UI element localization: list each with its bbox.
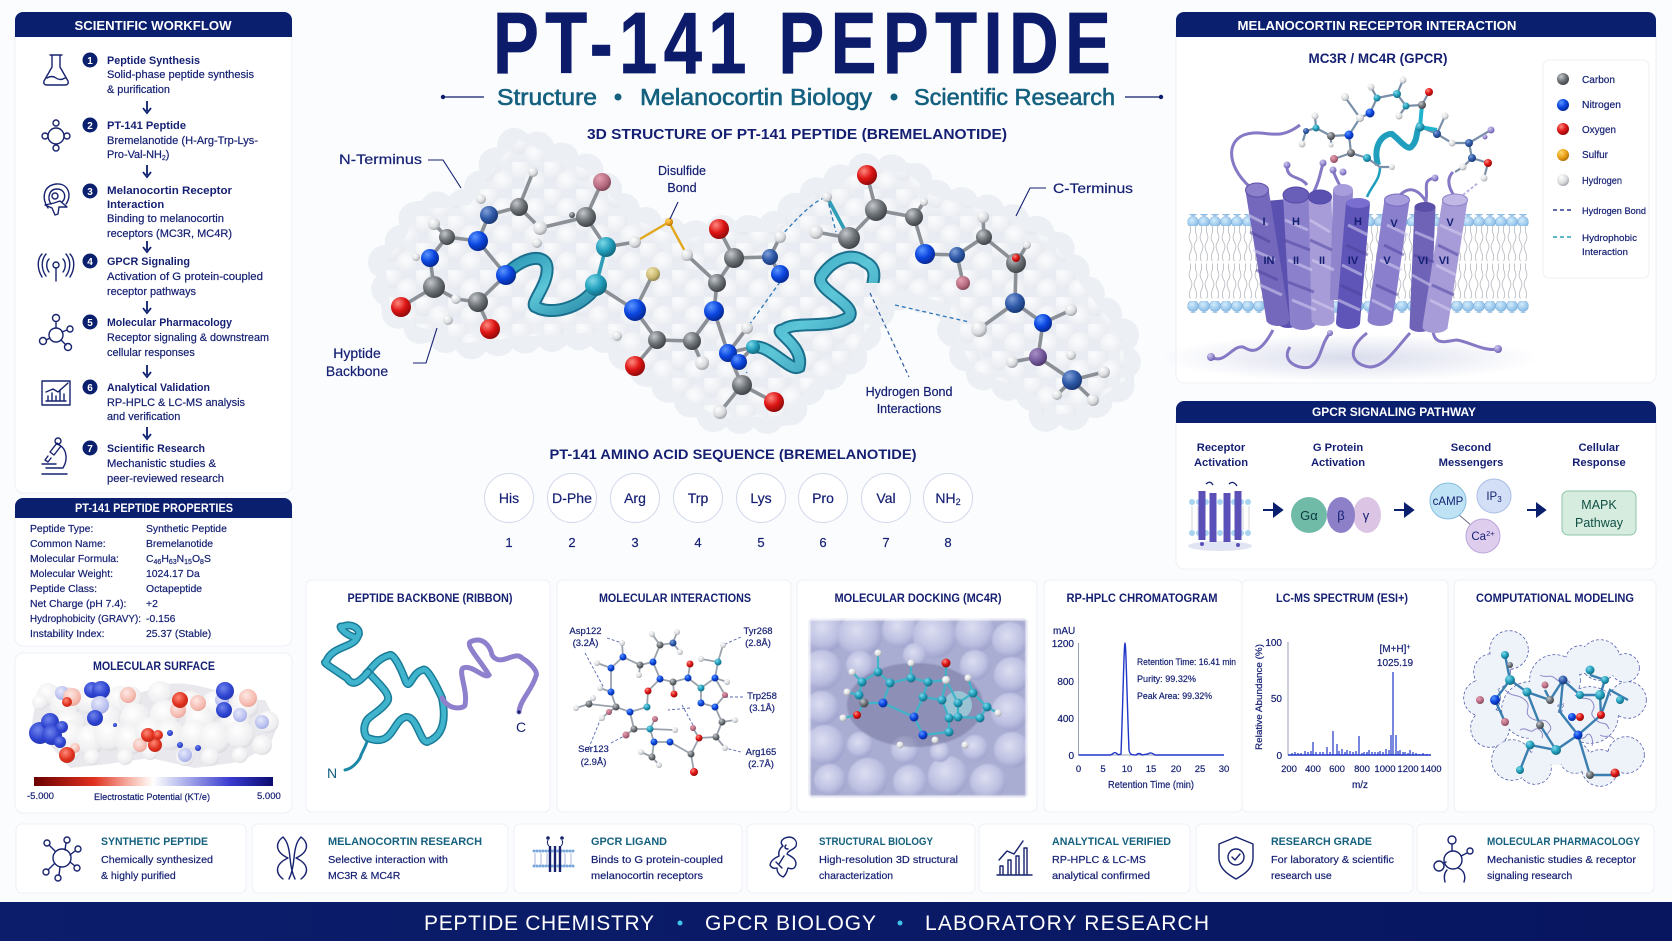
chromatogram chart: 5: [1100, 764, 1106, 775]
subtitle: Structure: [497, 84, 597, 110]
icon: protein: [770, 837, 796, 877]
amino acid sequence: 2: [568, 535, 576, 550]
card: synthetic peptide: [16, 824, 246, 893]
chromatogram chart: 10: [1122, 764, 1132, 775]
dashed hydrogen bonds: [739, 197, 969, 385]
second messengers: [1430, 479, 1511, 553]
heading: properties: PT-141 PEPTIDE PROPERTIES: [75, 503, 233, 515]
step labels: Response: [1572, 457, 1626, 469]
property rows: 15: [184, 559, 192, 566]
step labels: Messengers: [1439, 457, 1503, 469]
chart: electrostatic surface: [29, 681, 279, 768]
workflow step 5: [40, 314, 269, 359]
colour bar legend: Electrostatic Potential (KT/e): [94, 792, 210, 803]
second messengers: 3: [1497, 495, 1502, 504]
label: C-Terminus: [1016, 180, 1133, 216]
G protein: β: [1337, 508, 1345, 523]
card text: MELANOCORTIN RESEARCH: [328, 836, 482, 848]
card text: RESEARCH GRADE: [1271, 836, 1372, 848]
panel: molecular surface: [15, 653, 292, 813]
chromatogram chart: [1052, 626, 1236, 791]
amino acid sequence: His: [499, 490, 519, 506]
property rows: Peptide Class:: [30, 584, 97, 595]
arrow: [143, 101, 151, 113]
helix labels: [1262, 216, 1454, 267]
arrow: [1263, 504, 1282, 516]
subtitle: Melanocortin Biology: [640, 84, 873, 110]
workflow step 2: [42, 118, 258, 162]
panel: computational modeling: [1454, 580, 1656, 812]
footer banner: LABORATORY RESEARCH: [925, 912, 1209, 935]
property rows: Bremelanotide: [146, 539, 213, 550]
amino acid sequence: NH: [935, 490, 956, 506]
label: Disulfide Bond: Bond: [667, 181, 697, 195]
card text: characterization: [819, 870, 893, 882]
spectrum chart: m/z: [1352, 780, 1368, 791]
workflow step 6: [42, 380, 246, 423]
card text: [591, 836, 723, 882]
second messengers: IP: [1486, 491, 1497, 503]
amino acid sequence: [484, 474, 972, 550]
heading: amino acid sequence: PT-141 AMINO ACID SEQUENCE (BREMELANOTIDE): [550, 446, 916, 462]
residue labels: Tyr268: [743, 626, 773, 637]
card text: analytical confirmed: [1052, 870, 1150, 882]
computational model: [1464, 631, 1646, 786]
icon: molecule: [43, 837, 81, 881]
molecular surface cloud: [385, 140, 1125, 417]
icon: shield: [1219, 837, 1253, 879]
residue labels: (3.2Å): [573, 638, 598, 649]
card text: MC3R & MC4R: [328, 870, 401, 882]
workflow step 3: Melanocortin Receptor: [107, 185, 233, 197]
footer banner: [0, 902, 1672, 941]
property rows: S: [204, 554, 211, 565]
legend: Carbon: [1582, 75, 1615, 86]
heading: MOLECULAR SURFACE: [93, 659, 215, 673]
arrow: [143, 301, 151, 313]
property rows: O: [192, 554, 200, 565]
residue labels: [569, 626, 777, 770]
step labels: Receptor: [1197, 442, 1246, 454]
chromatogram chart: 15: [1146, 764, 1156, 775]
panel: scientific workflow: [15, 12, 292, 493]
workflow step 5: Molecular Pharmacology: [107, 317, 233, 329]
property rows: -0.156: [146, 614, 176, 625]
workflow step 5: Receptor signaling & downstream: [107, 332, 269, 344]
mini receptor icon: [1188, 482, 1252, 551]
property rows: H: [161, 554, 169, 565]
card text: [1487, 836, 1640, 882]
3D molecule: [326, 140, 1133, 419]
label: Hyptide Backbone: Backbone: [326, 363, 388, 379]
amino acid sequence: 8: [944, 535, 952, 550]
chromatogram chart: 400: [1057, 714, 1074, 725]
second messengers: cAMP: [1433, 496, 1464, 508]
MAPK pathway box: Pathway: [1575, 516, 1624, 530]
arrow: [143, 241, 151, 252]
residue labels: Ser123: [578, 744, 609, 755]
chromatogram chart: Purity: 99.32%: [1137, 674, 1196, 684]
spectrum chart: 0: [1276, 751, 1282, 762]
ribbon drawing: [325, 625, 536, 770]
heading: PEPTIDE BACKBONE (RIBBON): [348, 593, 513, 605]
step labels: Activation: [1311, 457, 1365, 469]
colour bar legend: -5.000: [27, 791, 54, 802]
workflow step 4: Activation of G protein-coupled: [107, 271, 263, 283]
property rows: N: [177, 554, 184, 565]
chromatogram chart: Retention Time: 16.41 min: [1137, 657, 1236, 667]
heading: LC-MS SPECTRUM (ESI+): [1276, 593, 1408, 605]
amino acid sequence: 5: [757, 535, 765, 550]
workflow step 1: Solid-phase peptide synthesis: [107, 69, 255, 81]
amino acid sequence: 7: [882, 535, 890, 550]
heading: MOLECULAR INTERACTIONS: [599, 593, 751, 605]
chromatogram chart: Retention Time (min): [1108, 780, 1194, 791]
panel: molecular interactions: [557, 580, 791, 812]
footer banner: GPCR BIOLOGY: [705, 912, 876, 935]
arrow: [1527, 504, 1545, 516]
workflow step 5: cellular responses: [107, 347, 195, 359]
panel: RP-HPLC chromatogram: [1044, 580, 1242, 812]
workflow step 6: 6: [87, 383, 93, 394]
bonds: [401, 172, 1104, 412]
workflow step 7: peer-reviewed research: [107, 473, 224, 485]
property rows: 46: [154, 559, 161, 566]
property rows: +2: [146, 599, 158, 610]
card text: SYNTHETIC PEPTIDE: [101, 836, 208, 848]
helix labels: I: [1262, 216, 1266, 228]
icon: molecule network: [1434, 836, 1473, 882]
interaction diagram: [573, 629, 743, 776]
workflow step 4: [38, 254, 263, 298]
workflow step 6: and verification: [107, 411, 180, 423]
label: N-Terminus: N-Terminus: [339, 151, 422, 167]
spectrum chart: 50: [1271, 694, 1282, 705]
subtitle: Scientific Research: [914, 84, 1115, 110]
card: GPCR ligand: [514, 824, 742, 893]
helix labels: V: [1446, 217, 1454, 229]
property rows: Instability Index:: [30, 629, 105, 640]
G protein: γ: [1363, 508, 1370, 523]
card text: [1271, 836, 1394, 882]
transmembrane helices: [1246, 183, 1468, 333]
heading: MOLECULAR DOCKING (MC4R): [834, 593, 1002, 605]
MAPK pathway box: MAPK: [1581, 498, 1617, 512]
arrow: [1394, 504, 1413, 516]
workflow step 3: receptors (MC3R, MC4R): [107, 228, 232, 240]
card text: Chemically synthesized: [101, 854, 213, 866]
ribbon end labels: N: [327, 765, 337, 781]
spectrum chart: 800: [1354, 764, 1370, 775]
G protein: Gα: [1300, 508, 1318, 523]
arrow: [143, 165, 151, 177]
workflow step 3: Interaction: [107, 199, 164, 211]
chromatogram chart: Peak Area: 99.32%: [1137, 691, 1212, 701]
property rows: Synthetic Peptide: [146, 524, 227, 535]
card text: ANALYTICAL VERIFIED: [1052, 836, 1171, 848]
workflow step 4: 4: [87, 257, 93, 268]
workflow step 2: 2: [87, 121, 93, 132]
workflow step 3: [44, 184, 233, 240]
workflow step 7: Scientific Research: [107, 443, 205, 455]
property rows: C: [146, 554, 154, 565]
workflow step 2: 2: [162, 155, 166, 162]
residue labels: Trp258: [747, 691, 777, 702]
icon: bar chart: [997, 841, 1032, 875]
spectrum chart: [1254, 638, 1442, 791]
card text: RP-HPLC & LC-MS: [1052, 854, 1146, 866]
amino acid sequence: Trp: [688, 490, 708, 506]
property rows: [30, 524, 227, 640]
property rows: Peptide Type:: [30, 524, 93, 535]
panel: LC-MS spectrum: [1242, 580, 1448, 812]
card text: [101, 836, 213, 882]
card text: Selective interaction with: [328, 854, 448, 866]
helix labels: II: [1319, 255, 1325, 267]
spectrum chart: 100: [1265, 638, 1282, 649]
amino acid sequence: Val: [876, 490, 896, 506]
property rows: Octapeptide: [146, 584, 202, 595]
residue labels: (3.1Å): [749, 703, 775, 714]
card text: For laboratory & scientific: [1271, 854, 1394, 866]
step labels: G Protein: [1313, 442, 1363, 454]
workflow step 2: Pro-Val-NH: [107, 149, 162, 161]
workflow step 1: & purification: [107, 84, 170, 96]
helix labels: VI: [1439, 255, 1449, 267]
spectrum chart: Relative Abundance (%): [1254, 644, 1265, 750]
helix labels: H: [1354, 216, 1362, 228]
legend: Nitrogen: [1582, 100, 1621, 111]
arrow: [143, 365, 151, 377]
card text: GPCR LIGAND: [591, 836, 667, 848]
card text: melanocortin receptors: [591, 870, 703, 882]
colour bar legend: 5.000: [257, 791, 281, 802]
helix labels: H: [1292, 216, 1300, 228]
loops: [1211, 125, 1498, 368]
second messengers: 2+: [1486, 529, 1495, 538]
card text: signaling research: [1487, 870, 1572, 882]
chromatogram chart: 30: [1219, 764, 1229, 775]
heading: GPCR SIGNALING PATHWAY: [1312, 405, 1476, 419]
property rows: Net Charge (pH 7.4):: [30, 599, 126, 610]
panel: GPCR signaling pathway: [1176, 401, 1656, 569]
card: research grade: [1196, 824, 1413, 893]
workflow step 2: ): [166, 149, 169, 161]
property rows: 1024.17 Da: [146, 569, 200, 580]
card: structural biology: [747, 824, 975, 893]
card: analytical verified: [979, 824, 1190, 893]
spectrum chart: 1025.19: [1377, 658, 1414, 669]
card text: High-resolution 3D structural: [819, 854, 958, 866]
workflow step 2: PT-141 Peptide: [107, 120, 186, 132]
amino acid sequence: Lys: [750, 490, 772, 506]
helix labels: VI: [1418, 255, 1428, 267]
label: Disulfide Bond: Disulfide: [658, 164, 706, 178]
helix labels: V: [1383, 255, 1391, 267]
step labels: Cellular: [1578, 442, 1620, 454]
chromatogram chart: 20: [1171, 764, 1181, 775]
helix labels: IN: [1264, 255, 1275, 267]
label: Disulfide Bond: [658, 164, 706, 219]
amino acid sequence: 3: [631, 535, 639, 550]
panel: peptide backbone ribbon: [306, 580, 550, 812]
property rows: Molecular Weight:: [30, 569, 113, 580]
legend: Oxygen: [1582, 125, 1616, 136]
workflow step 4: GPCR Signaling: [107, 256, 190, 268]
amino acid sequence: 2: [956, 497, 961, 507]
property rows: Common Name:: [30, 539, 106, 550]
label: Hydrogen Bond Interactions: [866, 293, 952, 416]
workflow step 1: Peptide Synthesis: [107, 55, 200, 67]
panel: peptide properties: [15, 498, 292, 646]
step labels: Activation: [1194, 457, 1248, 469]
chromatogram chart: mAU: [1053, 626, 1075, 637]
amino acid sequence: 1: [505, 535, 513, 550]
legend: Interaction: [1582, 247, 1628, 258]
legend: Hydrophobic: [1582, 233, 1637, 244]
spectrum chart: 1400: [1420, 764, 1442, 775]
card text: [819, 836, 958, 882]
chromatogram chart: 25: [1195, 764, 1205, 775]
card text: MOLECULAR PHARMACOLOGY: [1487, 836, 1640, 848]
panel: peptide backbone ribbon: C: [516, 719, 526, 735]
G protein: [1291, 497, 1381, 533]
label: C-Terminus: C-Terminus: [1053, 180, 1133, 196]
workflow step 3: 3: [87, 187, 93, 198]
workflow step 1: 1: [87, 56, 93, 67]
spectrum chart: +: [1406, 644, 1411, 651]
helix labels: V: [1390, 218, 1398, 230]
property rows: 63: [169, 559, 177, 566]
card text: [1052, 836, 1171, 882]
workflow step 7: Mechanistic studies &: [107, 458, 217, 470]
colour bar legend: [27, 777, 281, 803]
amino acid sequence: D-Phe: [552, 490, 592, 506]
chromatogram chart: 0: [1076, 764, 1081, 775]
heading: RP-HPLC CHROMATOGRAM: [1066, 593, 1218, 605]
MAPK pathway box: [1562, 491, 1636, 535]
property rows: 25.37 (Stable): [146, 629, 211, 640]
label: Hydrogen Bond Interactions: Interactions: [877, 402, 941, 416]
card text: & highly purified: [101, 870, 176, 882]
spectrum chart: 600: [1329, 764, 1345, 775]
helix labels: II: [1293, 255, 1299, 267]
workflow step 2: Bremelanotide (H-Arg-Trp-Lys-: [107, 135, 258, 147]
step labels: Second: [1451, 442, 1491, 454]
workflow step 5: 5: [87, 318, 93, 329]
amino acid sequence: 4: [694, 535, 702, 550]
heading: 3D structure: 3D STRUCTURE OF PT-141 PEPTIDE (BREMELANOTIDE): [587, 127, 1007, 143]
label: N-Terminus: [339, 151, 461, 188]
chromatogram chart: 1200: [1052, 639, 1074, 650]
legend: Sulfur: [1582, 150, 1609, 161]
footer banner: PEPTIDE CHEMISTRY: [424, 912, 654, 935]
label: Hydrogen Bond Interactions: Hydrogen Bond: [866, 385, 952, 399]
card text: research use: [1271, 870, 1332, 882]
property rows: Molecular Formula:: [30, 554, 119, 565]
amino acid sequence: Pro: [812, 490, 834, 506]
legend: Hydrogen: [1582, 176, 1622, 187]
card: melanocortin research: [252, 824, 508, 893]
workflow step 3: Binding to melanocortin: [107, 213, 224, 225]
icon: receptor X: [278, 837, 306, 879]
residue labels: Arg165: [746, 747, 776, 758]
subtitle: [441, 84, 1163, 110]
panel: molecular docking: [797, 580, 1037, 812]
receptor illustration: [1160, 76, 1540, 382]
amino acid sequence: 6: [819, 535, 827, 550]
label: Hyptide Backbone: Hyptide: [333, 345, 381, 361]
legend: Hydrogen Bond: [1582, 206, 1646, 217]
icon: membrane receptor: [534, 836, 576, 872]
spectrum chart: 200: [1281, 764, 1297, 775]
helix labels: IV: [1348, 255, 1359, 267]
workflow step 1: [44, 52, 255, 96]
second messengers: Ca: [1471, 531, 1486, 543]
panel: melanocortin receptor interaction: [1160, 12, 1656, 383]
disulfide bond: [635, 222, 687, 255]
workflow step 7: [42, 438, 224, 485]
spectrum chart: [M+H]: [1379, 644, 1406, 655]
arrow: [143, 427, 151, 439]
legend: [1543, 60, 1649, 278]
atoms: [391, 165, 1110, 419]
residue labels: Asp122: [569, 626, 602, 637]
step labels: [1194, 442, 1626, 469]
workflow step 6: RP-HPLC & LC-MS analysis: [107, 397, 246, 409]
ribbons: [506, 257, 874, 368]
card text: Binds to G protein-coupled: [591, 854, 723, 866]
spectrum chart: 1000: [1374, 764, 1396, 775]
heading: COMPUTATIONAL MODELING: [1476, 593, 1634, 605]
card: molecular pharmacology: [1417, 824, 1654, 893]
card text: Mechanistic studies & receptor: [1487, 854, 1637, 866]
workflow step 4: receptor pathways: [107, 286, 197, 298]
chromatogram chart: 800: [1057, 677, 1074, 688]
card text: [328, 836, 482, 882]
subheading: MC3R / MC4R (GPCR): [1308, 51, 1448, 66]
residue labels: (2.8Å): [745, 638, 771, 649]
chromatogram chart: 0: [1068, 751, 1074, 762]
heading: scientific workflow: SCIENTIFIC WORKFLOW: [74, 18, 232, 33]
card text: STRUCTURAL BIOLOGY: [819, 836, 933, 848]
heading: MELANOCORTIN RECEPTOR INTERACTION: [1238, 18, 1516, 33]
property rows: Hydrophobicity (GRAVY):: [30, 614, 141, 625]
bound peptide: [1298, 76, 1494, 197]
label: Hyptide Backbone: [326, 328, 437, 379]
spectrum chart: 400: [1305, 764, 1321, 775]
property rows: 8: [200, 559, 204, 566]
workflow step 6: Analytical Validation: [107, 382, 210, 394]
workflow step 7: 7: [87, 444, 93, 455]
docking surface: [802, 612, 1030, 800]
residue labels: (2.9Å): [581, 757, 606, 768]
amino acid sequence: Arg: [624, 490, 646, 506]
residue labels: (2.7Å): [748, 759, 774, 770]
spectrum chart: 1200: [1397, 764, 1419, 775]
